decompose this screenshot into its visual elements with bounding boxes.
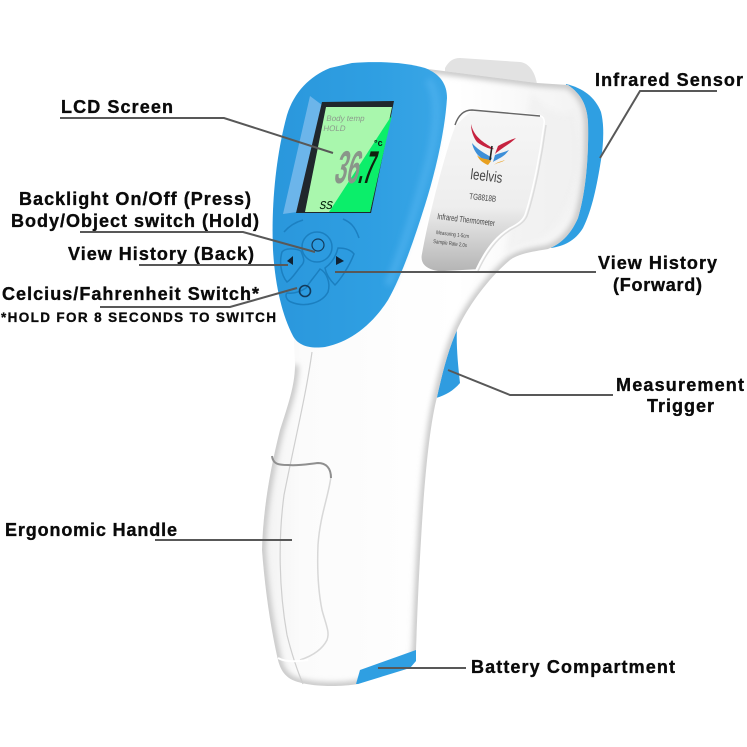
screen bevel: [283, 96, 322, 214]
LCD screen: [296, 101, 394, 213]
label: Celcius/Fahrenheit Switch: *HOLD FOR 8 SECONDS TO SWITCH: [1, 310, 276, 325]
label: Backlight / Body-Object switch: Body/Object switch (Hold): [11, 211, 259, 231]
label: Backlight / Body-Object switch: Backlight On/Off (Press): [19, 189, 251, 209]
product label plate: Sample Rate 2.0s: [433, 239, 467, 249]
LCD reading: 36: [331, 142, 367, 193]
LCD reading: .7: [355, 142, 382, 193]
rear tab: [445, 58, 537, 84]
front blue bumper: [273, 62, 447, 348]
label: Ergonomic Handle: Ergonomic Handle: [5, 520, 177, 540]
LCD screen: HOLD: [323, 124, 347, 133]
bumper highlight: [388, 80, 436, 285]
brand logo: [471, 124, 516, 165]
button: unit switch: [286, 269, 329, 305]
LCD wave icon: ss: [318, 196, 335, 213]
label: LCD Screen: LCD Screen: [61, 97, 173, 117]
label: Battery Compartment: Battery Compartment: [471, 657, 675, 677]
specs: Measuring 1-5cm: [436, 230, 470, 240]
label: Measurement Trigger: [448, 370, 744, 416]
label: Measurement Trigger: Trigger: [647, 396, 714, 416]
label: View History (Forward): [335, 253, 717, 295]
model number: TG8818B: [469, 191, 497, 204]
button: back: [281, 249, 304, 282]
label: View History (Forward): View History: [598, 253, 717, 273]
button cluster: [281, 219, 359, 305]
label: Celcius/Fahrenheit Switch: Celcius/Fahrenheit Switch*: [2, 284, 259, 304]
label: View History (Forward): (Forward): [613, 275, 702, 295]
label: Measurement Trigger: Measurement: [616, 375, 744, 395]
label: Infrared Sensor: [595, 70, 743, 158]
LCD reading: °c: [374, 138, 383, 148]
brand name: leelvis: [470, 166, 503, 187]
label: Celcius/Fahrenheit Switch: [1, 284, 297, 325]
thermometer device: [262, 58, 603, 686]
battery compartment: [356, 650, 416, 684]
label: Backlight / Body-Object switch: [11, 189, 315, 252]
infrared sensor band: [551, 84, 603, 248]
label: View History (Back): View History (Back): [68, 244, 254, 264]
label: Infrared Sensor: Infrared Sensor: [595, 70, 743, 90]
button: forward: [325, 248, 354, 285]
LCD status text: Body temp: [326, 114, 366, 123]
product label plate: [421, 110, 546, 272]
button: backlight: [302, 232, 332, 262]
trigger: [436, 326, 460, 398]
product name: Infrared Thermometer: [437, 211, 496, 228]
body shell: [262, 68, 588, 686]
shell edge shading: [262, 68, 588, 686]
label: LCD Screen: [60, 97, 333, 153]
handle seams: [272, 352, 331, 684]
